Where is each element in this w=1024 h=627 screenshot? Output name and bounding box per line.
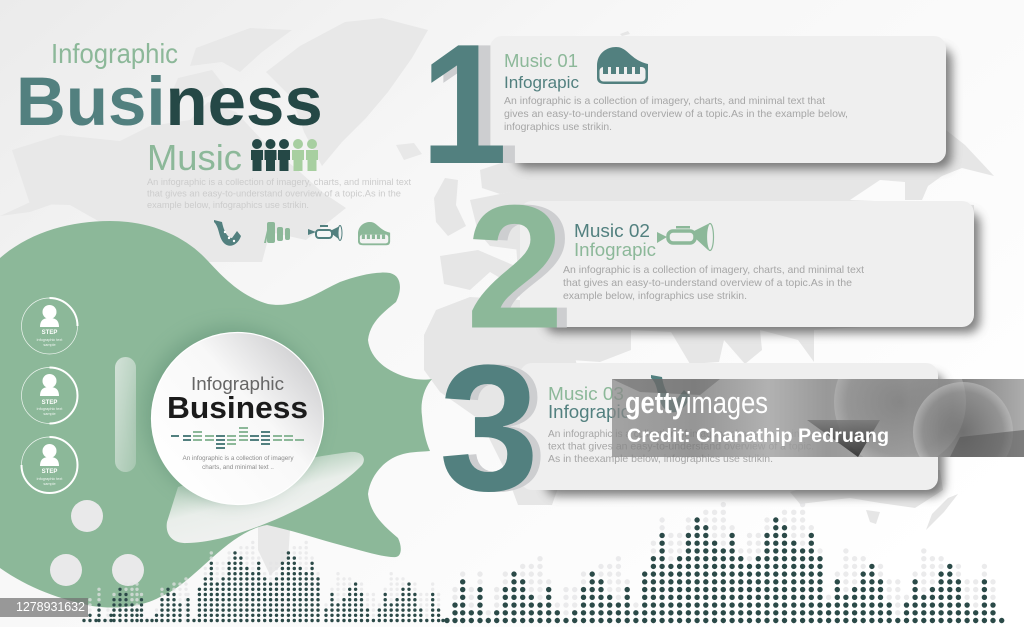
card 1 text: Infograpic: [504, 73, 579, 92]
image id tag: 1278931632: [16, 600, 85, 614]
card 1 text: infographics use strikin.: [504, 121, 612, 133]
icon: xylophone: [264, 222, 290, 243]
card 2 text: example below, infographics use strikin.: [563, 290, 747, 302]
card 2 text: [563, 220, 864, 302]
numeral 2: 2: [476, 170, 574, 366]
step 1: [22, 298, 78, 354]
watermark text: gettyimages: [625, 385, 768, 420]
watermark text: Credit: Chanathip Pedruang: [627, 426, 889, 447]
icon: trumpet: [657, 224, 714, 250]
numeral 3: 3: [439, 328, 539, 529]
card 3 text: Music 03: [548, 383, 624, 404]
card 2 text: that gives an easy-to-understand overview of a topic.As in the: [563, 277, 852, 289]
step 3: sample: [43, 482, 56, 486]
equalizer bars: [171, 427, 304, 449]
guitar body shape: [0, 221, 432, 608]
card 2 shadow: [545, 212, 980, 333]
title block: Music: [147, 137, 242, 178]
central circle badge: charts, and minimal text ..: [202, 464, 274, 471]
card 3 shadow: [545, 374, 944, 496]
numeral 2: 2: [466, 170, 564, 366]
title block: Business: [16, 63, 323, 140]
central circle badge: Business: [167, 390, 308, 425]
step 1: infographic text: [37, 338, 63, 342]
icon: people row: [251, 139, 318, 171]
icon: piano small: [358, 222, 390, 245]
card 3: [520, 363, 938, 490]
intro paragraph: that gives an easy-to-understand overview of a topic.As in the: [147, 188, 401, 200]
central circle badge: An infographic is a collection of imagery: [183, 455, 294, 462]
step 3: infographic text: [37, 477, 63, 481]
watermark text: [625, 385, 889, 447]
numeral 1: 1: [421, 8, 507, 200]
card 3 text: text that gives an easy-to-understand overview of a topic.: [548, 440, 814, 452]
watermark band: [612, 379, 1024, 457]
numeral 3: 3: [447, 328, 547, 529]
intro paragraph: example below, infographics use strikin.: [147, 200, 309, 211]
title block: Infographic: [51, 38, 178, 69]
step 1: STEP: [42, 330, 57, 336]
card 1 text: [504, 50, 848, 133]
card 2 text: Infograpic: [574, 240, 656, 260]
dot equalizer: light dots: [90, 504, 993, 620]
card 3 text: [548, 383, 818, 465]
card 3 text: Infograpic: [548, 402, 630, 422]
card 3 text: An infographic is a collection of imagery, charts, and minimal: [548, 428, 818, 440]
step 1: sample: [43, 343, 56, 347]
intro paragraph: [147, 177, 411, 211]
intro paragraph: An infographic is a collection of imagery, charts, and minimal text: [147, 177, 411, 188]
step 3: STEP: [42, 469, 57, 475]
card 1: [490, 36, 946, 163]
card 1 shadow: [515, 48, 952, 169]
guitar knobs: [50, 500, 144, 586]
pill: [115, 357, 136, 472]
numeral 1: 1: [433, 8, 519, 200]
step 2: sample: [43, 412, 56, 416]
image id tag: [0, 598, 88, 617]
icon: saxophone: [651, 375, 690, 412]
card 2 text: Music 02: [574, 220, 650, 241]
icon: piano: [597, 47, 648, 84]
step 2: infographic text: [37, 407, 63, 411]
step 2: STEP: [42, 400, 57, 406]
card 3 text: As in theexample below, infographics use strikin.: [548, 453, 773, 465]
title block: [16, 38, 323, 178]
card 1 text: gives an easy-to-understand overview of a topic.As in the example below,: [504, 108, 848, 120]
card 1 text: An infographic is a collection of imagery, charts, and minimal text that: [504, 95, 825, 107]
dot equalizer: dark dots: [84, 519, 1002, 620]
central circle badge: [144, 326, 324, 504]
card 2 text: An infographic is a collection of imagery, charts, and minimal text: [563, 264, 864, 276]
icon: trumpet small: [308, 225, 342, 240]
step 3: [22, 437, 78, 493]
card 1 text: Music 01: [504, 50, 578, 71]
central circle badge: Infographic: [191, 374, 284, 394]
icon: saxophone small: [214, 220, 241, 246]
card 2: [520, 201, 974, 327]
step 2: [22, 368, 78, 424]
guitar pick guard: [167, 452, 364, 543]
